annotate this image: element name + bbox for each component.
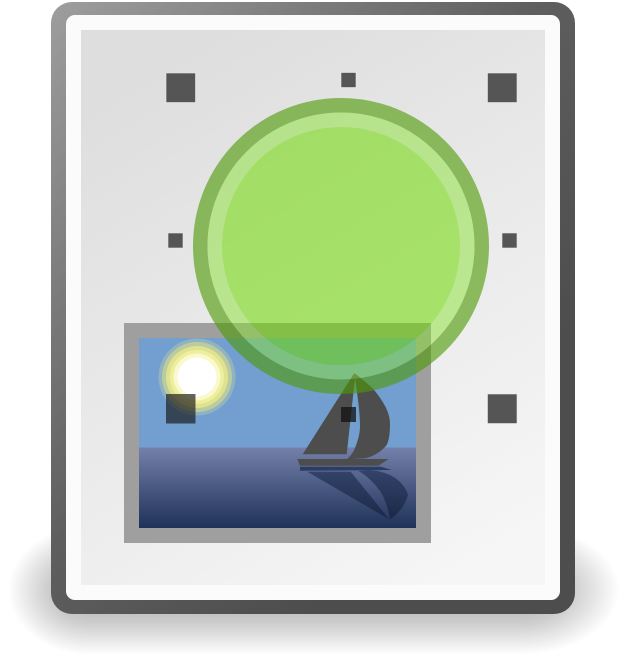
selection handles (166, 72, 517, 424)
green circle (200, 105, 482, 387)
picture border (124, 323, 431, 543)
outer ring (200, 105, 482, 387)
sky (139, 338, 416, 448)
circle fill (222, 127, 460, 365)
document frame (51, 2, 575, 614)
drop shadow (15, 540, 612, 650)
inner panel (81, 30, 545, 585)
sea (139, 448, 416, 528)
picture (124, 323, 431, 543)
middle ring (215, 120, 467, 372)
sun (158, 338, 236, 416)
document page (66, 15, 560, 600)
sailboat reflection (300, 467, 408, 520)
sailboat (297, 373, 390, 466)
